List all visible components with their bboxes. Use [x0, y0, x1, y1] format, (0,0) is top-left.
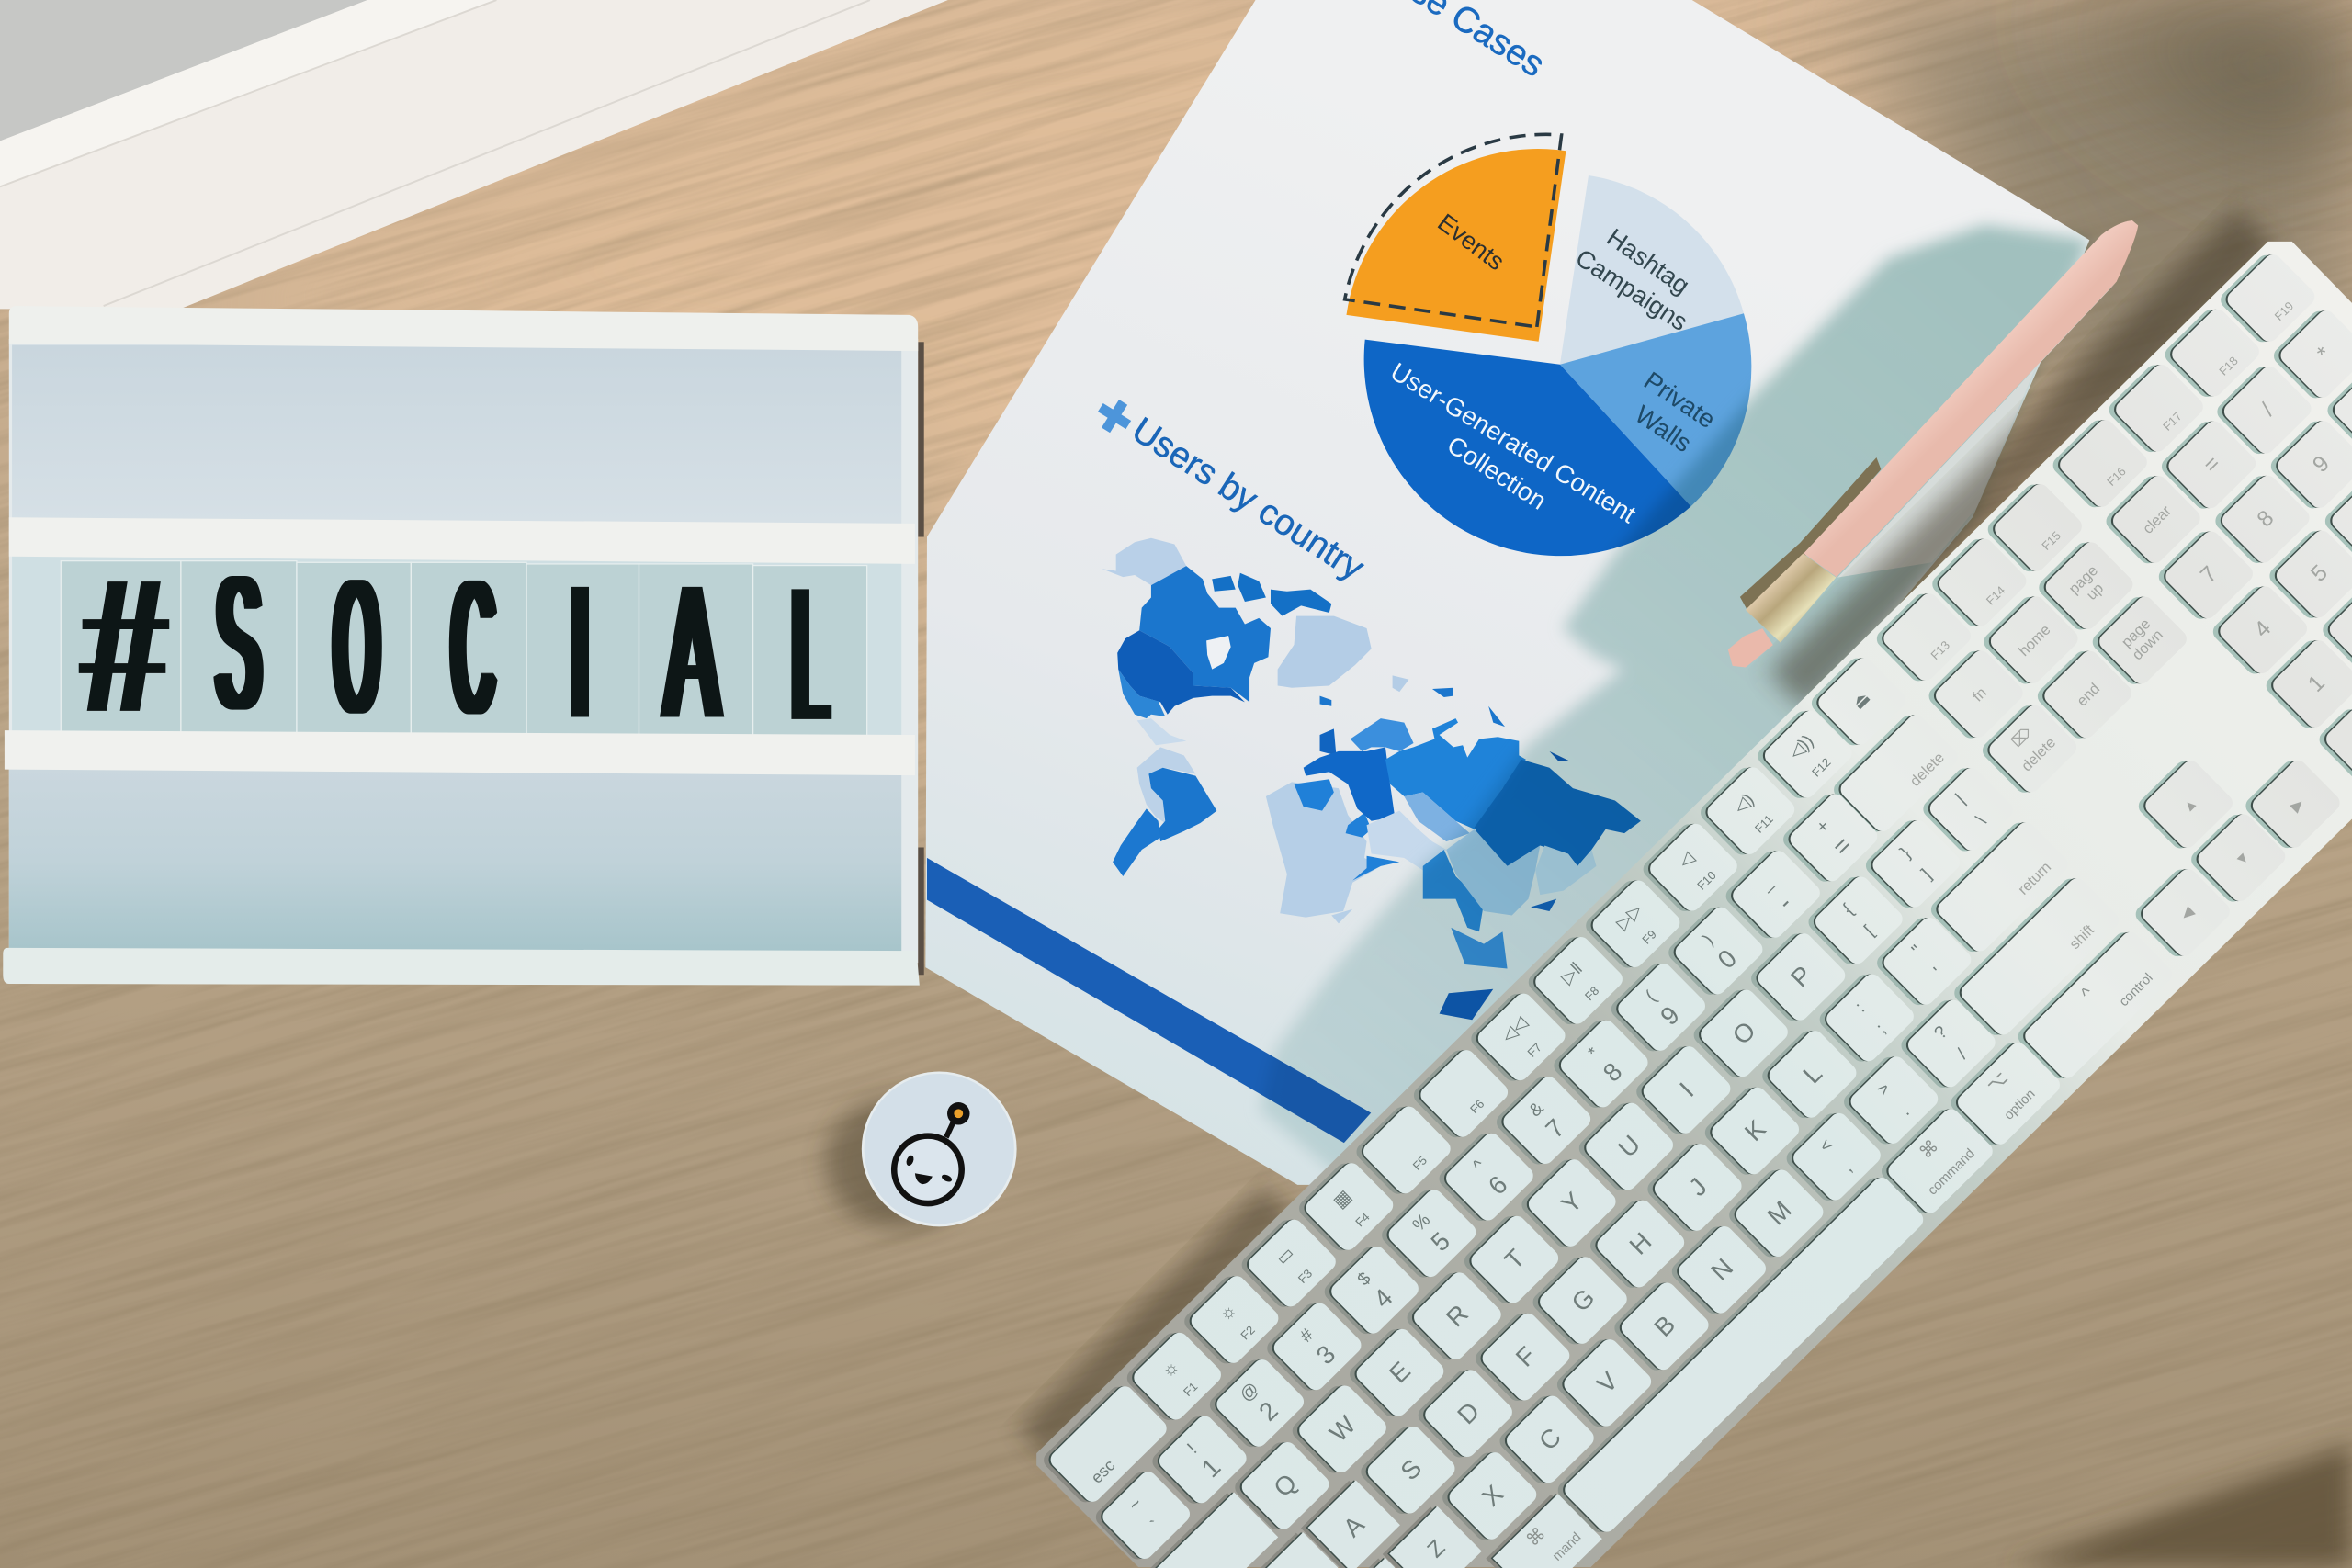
- labels: home row: return: [2015, 859, 2054, 898]
- map: southern cone: [1113, 808, 1160, 876]
- map: united kingdom: [1320, 728, 1336, 755]
- labels: navigation cluster: page: [2119, 615, 2154, 650]
- labels: modifier keys: ^: [2077, 983, 2098, 1004]
- map: africa: [1266, 782, 1381, 918]
- labels: function row: ☼: [1215, 1300, 1241, 1325]
- map: far east coast: [1535, 846, 1596, 895]
- pen: [1728, 220, 2138, 668]
- lettering: #SOCIAL: S: [217, 536, 261, 749]
- cut-off key shadows: [1151, 1482, 1594, 1568]
- lettering: #SOCIAL: O: [334, 543, 379, 752]
- labels: number row: #: [1296, 1325, 1317, 1347]
- labels: navigation cluster: up: [2084, 580, 2107, 604]
- labels: qwerty row: Q: [1268, 1468, 1302, 1503]
- labels: function row: F12: [1809, 755, 1834, 780]
- map: hudson bay: [1206, 636, 1231, 670]
- third rail: [5, 730, 915, 775]
- map: madagascar: [1331, 909, 1352, 923]
- labels: number row: ): [1699, 931, 1717, 949]
- labels: function row: F10: [1694, 868, 1719, 893]
- labels: bottom letter row: N: [1705, 1253, 1738, 1286]
- labels: bottom letter row: ?: [1930, 1022, 1951, 1043]
- lettering: #SOCIAL: I: [571, 547, 589, 758]
- labels: qwerty row: I: [1674, 1077, 1699, 1102]
- labels: function row: ◁◁: [1498, 1013, 1532, 1047]
- map: northern south america: [1137, 747, 1195, 823]
- bottom rail: [3, 948, 920, 986]
- labels: function row: F4: [1352, 1210, 1373, 1229]
- labels: navigation cluster: ▶: [2288, 795, 2307, 815]
- lit wedge beside pen: [1838, 282, 2117, 578]
- labels: home row: [1338, 859, 2054, 1542]
- labels: function row: F9: [1639, 927, 1659, 947]
- labels: home row: F: [1510, 1341, 1542, 1372]
- labels: qwerty row: E: [1384, 1356, 1416, 1388]
- map: alaska: [1102, 538, 1186, 585]
- map: arctic islands: [1212, 573, 1331, 616]
- badge disc: [862, 1072, 1017, 1226]
- labels: function row: [1088, 687, 1874, 1487]
- labels: number row: 1: [1196, 1452, 1226, 1483]
- icon: plus marker: [1091, 393, 1137, 439]
- labels: modifier keys: ⌘: [1522, 1524, 1550, 1551]
- labels: qwerty row: U: [1612, 1130, 1645, 1163]
- labels: qwerty row: W: [1324, 1410, 1362, 1448]
- labels: navigation cluster: fn: [1970, 684, 1990, 705]
- keyboard: [1018, 209, 2352, 1568]
- lower panel: [9, 768, 901, 953]
- labels: bottom letter row: X: [1476, 1480, 1509, 1512]
- slice label: hashtag campaigns: Campaigns: [1571, 243, 1693, 336]
- second rail: [9, 517, 915, 564]
- map: brazil: [1148, 768, 1216, 841]
- labels: numeric keypad: 9: [2308, 451, 2335, 478]
- labels: navigation cluster: ◀: [2177, 903, 2198, 923]
- labels: navigation cluster: ⌦: [2008, 724, 2035, 750]
- labels: bottom letter row: Z: [1423, 1536, 1450, 1562]
- labels: number row: !: [1183, 1439, 1201, 1458]
- labels: bottom letter row: M: [1762, 1195, 1797, 1231]
- labels: bottom letter row: C: [1533, 1422, 1566, 1456]
- labels: home row: G: [1566, 1283, 1600, 1317]
- labels: home row: ;: [1872, 1020, 1890, 1038]
- map: central america: [1137, 718, 1186, 745]
- labels: bottom letter row: /: [1953, 1044, 1972, 1063]
- labels: numeric keypad: =: [2199, 451, 2225, 478]
- heading: users by country: Users by country: [1125, 411, 1371, 588]
- badge face: [865, 1074, 1014, 1224]
- map: australia: [1440, 989, 1493, 1020]
- pie slice: private walls: [1560, 313, 1751, 506]
- labels: number row: %: [1408, 1210, 1434, 1235]
- upper panel: [12, 345, 901, 525]
- labels: bottom letter row: B: [1648, 1310, 1680, 1342]
- labels: numeric keypad: 4: [2250, 616, 2276, 642]
- labels: extended function keys: F19: [2272, 299, 2296, 323]
- labels: navigation cluster: ▼: [2232, 848, 2254, 870]
- map: southeast asia: [1451, 928, 1508, 968]
- map: canada: [1139, 566, 1271, 702]
- labels: bottom letter row: >: [1872, 1078, 1894, 1100]
- pen tip: [1728, 628, 1773, 668]
- labels: qwerty row: |: [1951, 790, 1969, 807]
- map: western us: [1118, 670, 1165, 718]
- labels: numeric keypad: clear: [2140, 502, 2175, 537]
- labels: home row: H: [1623, 1227, 1657, 1260]
- labels: home row: ": [1908, 942, 1927, 960]
- map: north africa countries: [1294, 779, 1372, 838]
- labels: bottom letter row: V: [1591, 1366, 1623, 1399]
- labels: qwerty row: T: [1499, 1244, 1530, 1275]
- labels: navigation cluster: home: [2016, 621, 2054, 660]
- labels: modifier keys: command: [1926, 1146, 1978, 1199]
- map: united states: [1117, 630, 1245, 715]
- labels: navigation cluster: ▲: [2179, 795, 2201, 817]
- world map: [1102, 538, 1641, 1020]
- labels: function row: ◁)): [1785, 731, 1817, 763]
- labels: bottom letter row: ,: [1838, 1158, 1856, 1176]
- labels: qwerty row: {: [1839, 900, 1858, 919]
- labels: modifier keys: control: [2117, 971, 2156, 1010]
- keyboard body: [1036, 242, 2352, 1567]
- keyboard cast shadow left: [1018, 1186, 1295, 1461]
- labels: home row: L: [1797, 1059, 1827, 1089]
- map: arabian coast: [1352, 856, 1399, 880]
- labels: function row: ▭: [1272, 1243, 1298, 1269]
- light box sign: [3, 306, 924, 986]
- labels: numeric keypad: 8: [2253, 506, 2278, 532]
- labels: numeric keypad: 7: [2196, 561, 2222, 588]
- key caps: [1049, 253, 2352, 1561]
- labels: function row: F7: [1525, 1040, 1544, 1060]
- labels: home row: ': [1930, 964, 1947, 980]
- labels: number row: ^: [1469, 1156, 1489, 1176]
- labels: function row: F6: [1467, 1097, 1487, 1116]
- labels: number row: delete: [1907, 750, 1948, 790]
- labels: number row: 5: [1425, 1226, 1455, 1257]
- labels: number row: 6: [1483, 1170, 1513, 1201]
- labels: number row: -: [1771, 889, 1797, 916]
- labels: number row: @: [1236, 1379, 1263, 1405]
- labels: number row: 4: [1368, 1283, 1398, 1314]
- pie chart: [1345, 134, 1751, 556]
- labels: qwerty row: R: [1441, 1299, 1474, 1332]
- slice label: user-generated content collection: Collection: [1442, 430, 1552, 515]
- map: india: [1423, 850, 1484, 931]
- labels: qwerty row: [1268, 790, 1991, 1503]
- labels: home row: D: [1452, 1396, 1485, 1429]
- lettering: #SOCIAL: A: [665, 547, 718, 758]
- labels: bottom letter row: shift: [2066, 921, 2098, 953]
- map: china: [1446, 829, 1540, 915]
- labels: qwerty row: Y: [1555, 1187, 1588, 1219]
- labels: numeric keypad: [2140, 342, 2336, 697]
- letter rail background: [12, 555, 901, 738]
- labels: navigation cluster: delete: [2018, 734, 2059, 774]
- labels: extended function keys: F16: [2104, 464, 2129, 489]
- map: eastern russia: [1475, 760, 1641, 866]
- labels: navigation cluster: down: [2129, 626, 2166, 663]
- labels: bottom letter row: .: [1895, 1101, 1914, 1120]
- map: western russia: [1385, 718, 1526, 829]
- labels: bottom letter row: <: [1815, 1135, 1838, 1156]
- labels: extended function keys: F18: [2216, 354, 2241, 378]
- map: japan: [1531, 899, 1556, 911]
- labels: number row: [1125, 750, 1948, 1535]
- labels: qwerty row: \: [1973, 811, 1991, 829]
- paper sheet: [925, 0, 2089, 1185]
- labels: extended function keys: F15: [2039, 528, 2064, 553]
- labels: number row: _: [1755, 872, 1777, 895]
- labels: function row: F8: [1582, 984, 1601, 1003]
- labels: number row: *: [1584, 1043, 1603, 1063]
- labels: function row: ◁: [1675, 848, 1699, 873]
- cut-off key dark edges: [1156, 1482, 1600, 1568]
- labels: number row: (: [1642, 987, 1660, 1006]
- pen gold collar: [1746, 553, 1836, 643]
- map: scandinavia: [1351, 718, 1414, 751]
- slice label: user-generated content collection: User-Generated Content: [1385, 357, 1641, 528]
- key dark edges: [1047, 253, 2352, 1561]
- lettering: #SOCIAL: L: [792, 548, 828, 760]
- labels: bottom letter row: [1423, 921, 2098, 1562]
- light box rear panel: [9, 339, 918, 963]
- labels: function row: F2: [1238, 1323, 1258, 1343]
- light box dark side edge upper: [918, 342, 924, 537]
- labels: qwerty row: [: [1860, 921, 1879, 940]
- labels: qwerty row: ]: [1917, 865, 1936, 883]
- labels: number row: +: [1812, 816, 1834, 838]
- labels: modifier keys: ⌥: [1984, 1067, 2012, 1097]
- labels: numeric keypad: 1: [2303, 671, 2330, 697]
- labels: function row: F1: [1181, 1380, 1200, 1399]
- labels: number row: 0: [1713, 944, 1742, 974]
- labels: function row: esc: [1088, 1456, 1118, 1487]
- labels: function row: ▷▷: [1612, 900, 1646, 933]
- labels: extended function keys: [1928, 299, 2296, 662]
- labels: modifier keys: option: [2002, 1087, 2038, 1123]
- pin badge: [825, 1072, 1017, 1228]
- pie slice: user-generated content: [1364, 340, 1690, 556]
- labels: function row: ▦: [1329, 1186, 1356, 1213]
- labels: modifier keys: ⌘: [1916, 1136, 1943, 1163]
- map: central asia: [1404, 793, 1470, 841]
- labels: qwerty row: }: [1896, 843, 1915, 863]
- labels: home row: J: [1683, 1172, 1713, 1201]
- window sill at top left: [0, 0, 948, 309]
- map: europe: [1304, 747, 1395, 821]
- badge shadow: [825, 1097, 975, 1228]
- top rail: [9, 306, 918, 351]
- labels: number row: 2: [1253, 1396, 1283, 1427]
- labels: number row: &: [1525, 1098, 1548, 1121]
- slice label: private walls: Private: [1639, 366, 1721, 434]
- labels: home row: :: [1851, 998, 1869, 1016]
- pie slice: events: [1346, 149, 1566, 342]
- labels: extended function keys: F17: [2160, 409, 2185, 434]
- labels: number row: =: [1826, 830, 1857, 862]
- map: small northern islands: [1320, 675, 1570, 761]
- labels: qwerty row: P: [1785, 960, 1817, 993]
- labels: number row: ~: [1125, 1494, 1147, 1516]
- labels: qwerty row: O: [1727, 1016, 1761, 1050]
- labels: function row: ⏏: [1849, 687, 1874, 714]
- labels: number row: 3: [1311, 1339, 1340, 1370]
- pie slice: hashtag campaigns: [1560, 175, 1744, 365]
- keyboard cast shadow right: [1768, 209, 2276, 710]
- lettering: #SOCIAL: #: [85, 540, 164, 751]
- labels: home row: K: [1739, 1114, 1771, 1146]
- cast shadow on paper: [1260, 225, 2089, 1185]
- map: middle east: [1367, 811, 1446, 870]
- labels: home row: A: [1338, 1510, 1370, 1542]
- labels: navigation cluster: page: [2065, 562, 2101, 597]
- light box dark side edge lower: [918, 847, 924, 975]
- slice label: events: Events: [1432, 209, 1510, 276]
- labels: modifier keys: [1522, 971, 2156, 1564]
- lettering: #SOCIAL: C: [452, 542, 493, 753]
- letter tiles: [61, 561, 867, 741]
- labels: navigation cluster: end: [2074, 681, 2103, 709]
- labels: number row: 7: [1540, 1113, 1570, 1144]
- labels: function row: F11: [1752, 812, 1776, 836]
- dashed outline around events: [1345, 134, 1562, 327]
- labels: extended function keys: F13: [1928, 638, 1952, 662]
- icon: winking robot mascot: [894, 1102, 970, 1203]
- labels: function row: F3: [1295, 1267, 1315, 1286]
- labels: number row: `: [1148, 1517, 1166, 1535]
- pen clip: [1740, 457, 1881, 611]
- labels: function row: ◁): [1730, 790, 1758, 818]
- labels: number row: 8: [1598, 1057, 1627, 1088]
- labels: function row: F5: [1410, 1154, 1430, 1173]
- labels: navigation cluster: [1970, 562, 2307, 923]
- labels: function row: ▷‖: [1557, 959, 1587, 988]
- labels: modifier keys: mand: [1550, 1530, 1584, 1564]
- map: greenland: [1278, 616, 1372, 688]
- labels: function row: ☼: [1158, 1356, 1183, 1382]
- slice label: hashtag campaigns: Hashtag: [1601, 222, 1695, 299]
- labels: numeric keypad: 5: [2306, 560, 2333, 587]
- pen barrel: [1804, 220, 2138, 577]
- blue band on paper: [927, 858, 1371, 1143]
- labels: number row: $: [1353, 1269, 1375, 1290]
- key shadows: [1042, 254, 2352, 1561]
- slice label: private walls: Walls: [1630, 400, 1697, 457]
- labels: extended function keys: F14: [1984, 583, 2007, 607]
- labels: number row: 9: [1655, 1000, 1685, 1031]
- printed report paper: [925, 0, 2117, 1185]
- labels: numeric keypad: /: [2256, 399, 2278, 421]
- labels: numeric keypad: *: [2312, 342, 2336, 366]
- lettering: #SOCIAL: [85, 536, 828, 760]
- labels: home row: S: [1395, 1453, 1427, 1485]
- slice label: private walls: [1630, 366, 1721, 457]
- cut-off key caps: [1159, 1482, 1601, 1568]
